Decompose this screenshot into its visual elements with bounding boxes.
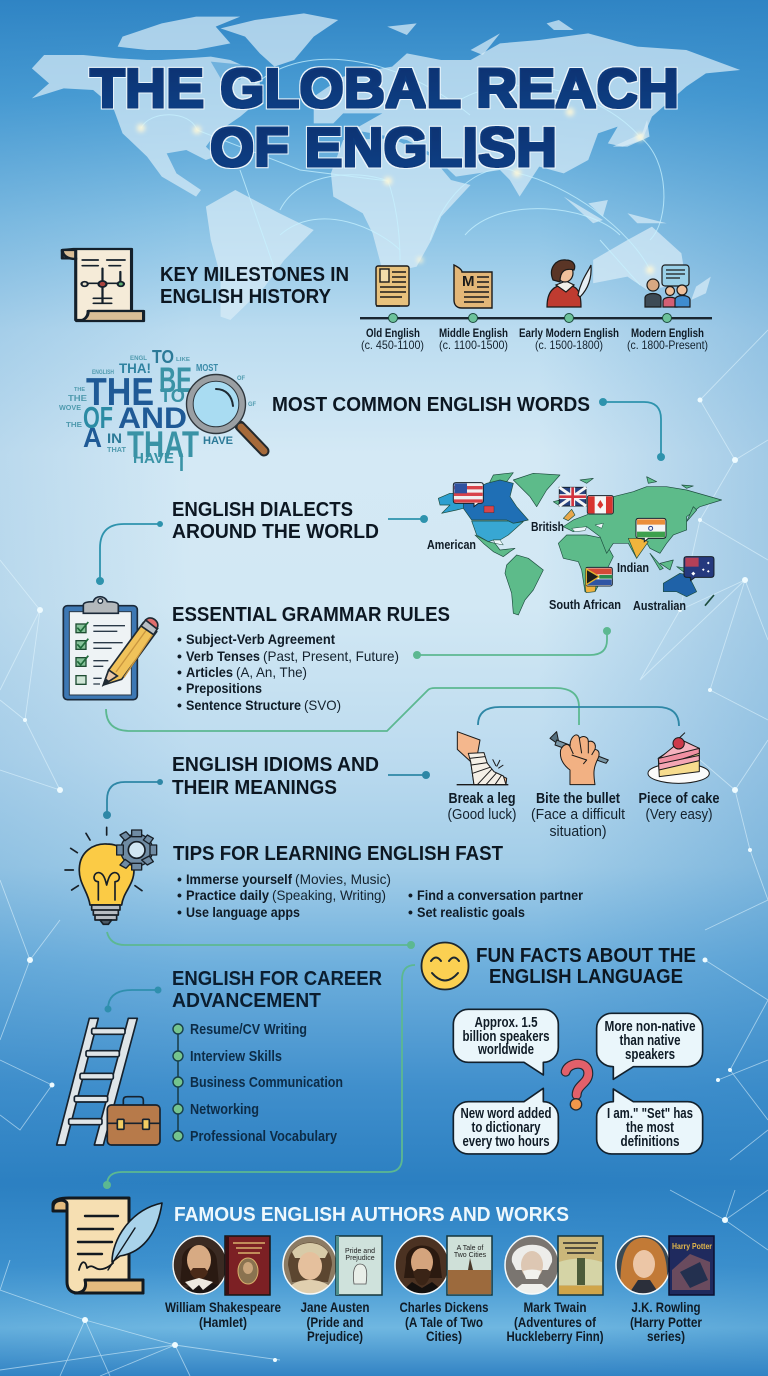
book: Pride and Prejudice — [336, 1236, 382, 1295]
word cloud: IN — [107, 430, 122, 446]
author captions: series) — [647, 1328, 685, 1344]
connector: idioms to tips — [103, 779, 163, 819]
connector: idioms heading to icons — [388, 771, 430, 779]
icon: question mark — [566, 1064, 588, 1110]
connector: fun facts to authors — [103, 965, 415, 1189]
heading: career: ADVANCEMENT — [172, 990, 321, 1012]
career list timeline: Networking — [190, 1102, 259, 1118]
heading: fun facts: ENGLISH LANGUAGE — [489, 966, 683, 988]
heading: key milestones: ENGLISH HISTORY — [160, 286, 332, 308]
career list timeline: Resume/CV Writing — [190, 1022, 307, 1038]
career list timeline: Business Communication — [190, 1075, 343, 1091]
icon: modern people with speech bubble — [645, 265, 690, 307]
grammar rules list: Articles — [186, 664, 233, 680]
connector: career to ladder — [104, 986, 162, 1012]
timeline: (c. 1100-1500) — [439, 338, 508, 352]
idiom labels: (Very easy) — [646, 806, 713, 823]
heading: fun facts — [476, 945, 696, 988]
timeline: (c. 450-1100) — [361, 338, 424, 352]
fun fact texts: Approx. 1.5 — [474, 1015, 538, 1031]
grammar rules list — [177, 631, 399, 713]
heading: idioms: THEIR MEANINGS — [172, 777, 337, 799]
heading: dialects: AROUND THE WORLD — [172, 521, 379, 543]
connector: dialects to grammar — [96, 521, 163, 585]
author captions: Charles Dickens — [400, 1299, 489, 1315]
word cloud: BE — [159, 361, 192, 400]
fun fact texts: definitions — [620, 1134, 680, 1150]
portrait: Rowling — [616, 1236, 670, 1295]
word cloud: THE — [74, 387, 86, 393]
dialect labels: American — [427, 537, 476, 552]
word cloud: ENGL — [130, 356, 147, 362]
word cloud: TO — [152, 347, 174, 367]
fun fact texts: New word added — [460, 1106, 552, 1122]
grammar rules list: Sentence Structure — [186, 697, 301, 713]
grammar rules list: Prepositions — [186, 680, 262, 696]
book: A Tale of Two Cities — [447, 1236, 492, 1295]
timeline: Middle English — [439, 326, 508, 340]
fun fact texts: to dictionary — [472, 1120, 540, 1136]
portrait: Shakespeare — [173, 1236, 227, 1295]
icon: old english manuscript — [376, 266, 409, 306]
fun fact texts: More non-native — [604, 1019, 696, 1035]
heading: fun facts: FUN FACTS ABOUT THE — [476, 945, 696, 967]
word cloud: OF — [237, 376, 245, 382]
tips list: Find a conversation partner — [417, 887, 583, 903]
fun fact texts: billion speakers — [462, 1029, 550, 1045]
title: OF ENGLISH — [210, 116, 557, 178]
background world map — [32, 13, 740, 320]
author captions: Mark Twain — [524, 1299, 586, 1315]
author captions — [165, 1299, 702, 1344]
heading: idioms — [172, 754, 379, 799]
fun fact texts: I am." "Set" has — [607, 1106, 693, 1122]
book: Harry Potter — [669, 1236, 714, 1295]
connector: idiom arc — [478, 707, 679, 726]
icon: light bulb and gear — [65, 827, 157, 924]
word cloud: AND — [118, 402, 187, 435]
book: Huckleberry Finn — [558, 1236, 603, 1295]
title: THE GLOBAL REACH — [90, 57, 679, 119]
heading: dialects — [172, 499, 379, 543]
background connection arcs — [141, 59, 664, 285]
connector: grammar to idioms — [106, 688, 579, 731]
grammar rules list: (SVO) — [304, 697, 341, 713]
idiom labels: Break a leg — [448, 790, 516, 807]
speech bubbles — [453, 1009, 703, 1154]
heading: famous authors: FAMOUS ENGLISH AUTHORS AND WORKS — [174, 1204, 569, 1226]
tips list: Use language apps — [186, 904, 300, 920]
word cloud: TO — [160, 386, 185, 406]
word cloud: OF — [83, 400, 113, 435]
icon: clipboard with pencil — [63, 597, 158, 700]
tips list: • — [177, 904, 182, 920]
word cloud: THA! — [119, 360, 151, 376]
portrait: Twain — [505, 1236, 559, 1295]
idiom labels: situation) — [550, 823, 606, 840]
word cloud: THE — [86, 371, 154, 414]
connector: words to dialect map — [599, 398, 665, 461]
grammar rules list: Verb Tenses — [186, 648, 260, 664]
author captions: Huckleberry Finn) — [506, 1328, 604, 1344]
heading: grammar: ESSENTIAL GRAMMAR RULES — [172, 604, 450, 626]
tips list: Set realistic goals — [417, 904, 525, 920]
idiom labels: Piece of cake — [638, 790, 720, 807]
dialect labels: Australian — [633, 598, 686, 613]
idiom labels: Bite the bullet — [536, 790, 620, 807]
word cloud: GF — [248, 402, 256, 408]
career list timeline: Interview Skills — [190, 1049, 282, 1065]
timeline: (c. 1800-Present) — [627, 338, 708, 352]
icon: fist biting bullet — [550, 732, 608, 785]
author captions: (Pride and — [306, 1314, 364, 1330]
connector: tips to fun facts — [107, 932, 415, 949]
tips list: (Speaking, Writing) — [272, 887, 386, 903]
background network lines — [0, 330, 768, 1376]
heading: key milestones — [160, 264, 349, 308]
fun fact texts — [460, 1015, 696, 1150]
career list timeline: Professional Vocabulary — [190, 1129, 337, 1145]
word cloud: I — [179, 449, 184, 477]
tips list: • — [408, 887, 413, 903]
idiom labels: (Good luck) — [448, 806, 517, 823]
author captions: (A Tale of Two — [405, 1314, 483, 1330]
word cloud — [59, 347, 256, 477]
heading: career — [172, 968, 383, 1012]
flags on dialect map — [453, 483, 714, 586]
word cloud: A — [83, 422, 102, 453]
grammar rules list: • — [177, 631, 182, 647]
icon: scroll and quill — [53, 1198, 162, 1293]
tips list: • — [177, 887, 182, 903]
tips list: Immerse yourself — [186, 871, 292, 887]
connector: dialect heading to map — [388, 515, 428, 523]
career list timeline — [173, 1022, 343, 1145]
heading: dialects: ENGLISH DIALECTS — [172, 499, 353, 521]
tips list: (Movies, Music) — [295, 871, 391, 887]
grammar rules list: • — [177, 680, 182, 696]
grammar rules list: • — [177, 664, 182, 680]
author captions: (Adventures of — [514, 1314, 596, 1330]
word cloud: ENGLISH — [92, 370, 114, 376]
author captions: Jane Austen — [300, 1299, 370, 1315]
grammar rules list: (A, An, The) — [236, 664, 307, 680]
grammar rules list: Subject-Verb Agreement — [186, 631, 335, 647]
dialect labels: Indian — [617, 560, 649, 575]
tips list: • — [408, 904, 413, 920]
fun fact texts: the most — [626, 1120, 674, 1136]
icon: smiley — [422, 942, 468, 990]
tips list — [177, 871, 583, 920]
author captions: William Shakespeare — [165, 1299, 281, 1315]
author captions: (Harry Potter — [630, 1314, 702, 1330]
dialect labels: South African — [549, 597, 621, 612]
icon: slice of cake — [648, 733, 709, 783]
title — [90, 57, 679, 178]
word cloud: THE — [68, 394, 88, 403]
idiom labels: (Face a difficult — [531, 806, 626, 823]
word cloud: MOST — [196, 363, 218, 374]
word cloud: THE — [66, 422, 82, 429]
timeline: (c. 1500-1800) — [535, 338, 603, 352]
fun fact texts: than native — [620, 1033, 680, 1049]
grammar rules list: • — [177, 648, 182, 664]
heading: career: ENGLISH FOR CAREER — [172, 968, 383, 990]
dialect world map — [438, 473, 722, 615]
author captions: Prejudice) — [307, 1328, 363, 1344]
portrait: Dickens — [395, 1236, 449, 1295]
icon: bandaged leg — [457, 732, 508, 785]
timeline: Modern English — [631, 326, 704, 340]
book: A Tale of Two Cities: A Tale of — [457, 1245, 483, 1252]
word cloud: LIKE — [176, 357, 191, 363]
timeline: Early Modern English — [519, 326, 619, 340]
heading: most common words: MOST COMMON ENGLISH WORDS — [272, 394, 590, 416]
fun fact texts: speakers — [625, 1047, 675, 1063]
tips list: Practice daily — [186, 887, 269, 903]
author captions: (Hamlet) — [199, 1314, 247, 1330]
tips list: • — [177, 871, 182, 887]
author captions: Cities) — [426, 1328, 462, 1344]
heading: tips: TIPS FOR LEARNING ENGLISH FAST — [173, 843, 503, 865]
book: Harry Potter: Harry Potter — [672, 1242, 712, 1251]
heading: idioms: ENGLISH IDIOMS AND — [172, 754, 379, 776]
author captions: J.K. Rowling — [632, 1299, 700, 1315]
icon: ladder and briefcase — [57, 1018, 160, 1145]
connector: grammar to map — [413, 627, 611, 659]
word cloud: HAVE — [203, 435, 233, 447]
word cloud: WOVE — [59, 405, 81, 412]
idiom labels — [448, 790, 720, 840]
dialect labels: British — [531, 519, 564, 534]
icon: writer with quill — [547, 260, 591, 307]
book: Hamlet — [225, 1236, 270, 1295]
portrait: Austen — [283, 1236, 337, 1295]
word cloud: HAVE — [133, 450, 174, 467]
fun fact texts: every two hours — [462, 1134, 550, 1150]
icon: middle english book — [454, 265, 492, 308]
dialect labels — [427, 519, 686, 613]
timeline — [360, 314, 712, 352]
word cloud: THAT — [127, 424, 199, 465]
book: Pride and Prejudice: Pride and — [345, 1248, 375, 1255]
icon: middle english book: M — [462, 273, 474, 290]
book: A Tale of Two Cities: Two Cities — [454, 1252, 487, 1259]
timeline: Old English — [366, 326, 420, 340]
heading: key milestones: KEY MILESTONES IN — [160, 264, 349, 286]
grammar rules list: • — [177, 697, 182, 713]
fun fact texts: worldwide — [477, 1042, 534, 1058]
icon: history scroll — [62, 249, 144, 321]
grammar rules list: (Past, Present, Future) — [263, 648, 399, 664]
book: Pride and Prejudice: Prejudice — [345, 1255, 375, 1262]
word cloud: THAT — [107, 447, 127, 454]
icon: magnifying glass — [186, 374, 264, 451]
